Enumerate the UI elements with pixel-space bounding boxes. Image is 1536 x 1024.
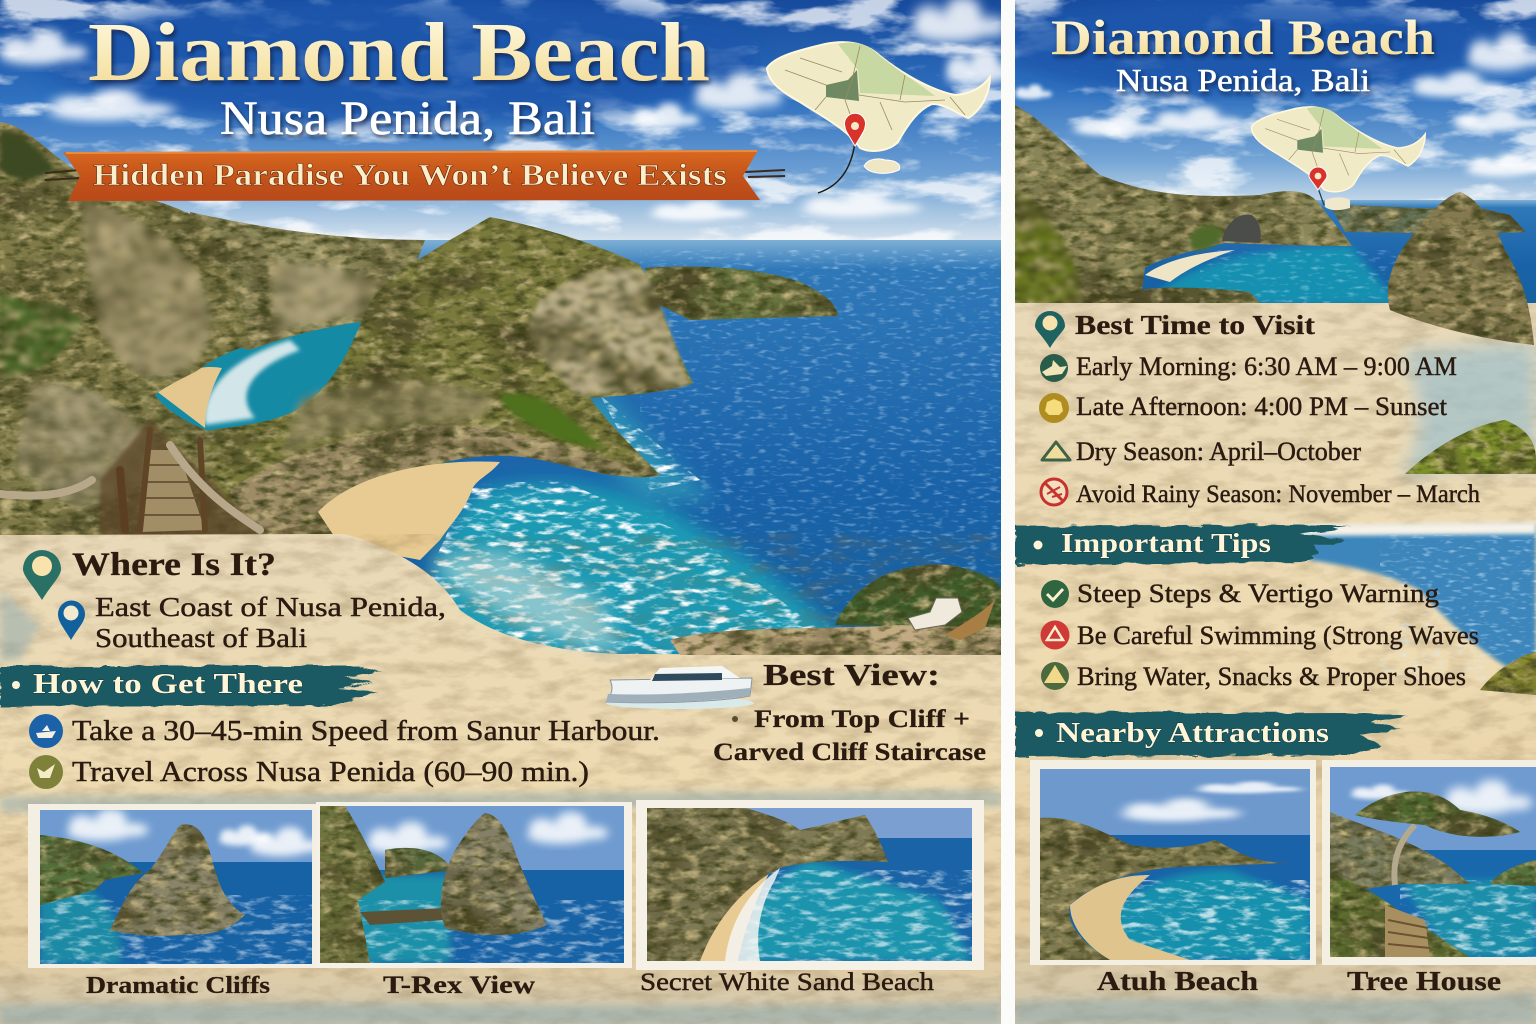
photo: atuh beach: [1030, 760, 1316, 965]
route step: speed boat: Take a 30–45-min Speed from Sanur Harbour.: [72, 716, 660, 747]
where is it: heading: Where Is It?: [72, 547, 276, 583]
right scene: sea stack: [1388, 192, 1534, 345]
photo: t-rex view: [316, 802, 632, 968]
photo: tree house: [1322, 760, 1536, 965]
right scene: sky and clouds: [1000, 0, 1536, 215]
photo captions: Tree House: [1347, 966, 1501, 996]
best time: late afternoon: Late Afternoon: 4:00 PM – Sunset: [1076, 392, 1448, 421]
title: Diamond Beach: [1051, 9, 1435, 65]
bush near dry season row: [1405, 420, 1536, 474]
where is it: location text: [95, 592, 446, 653]
hero scene: left cliffs: [0, 122, 250, 540]
map: Bali with pin: [767, 42, 990, 193]
best time: dry season: Dry Season: April–October: [1076, 437, 1361, 466]
tip: careful swimming: Be Careful Swimming (Strong Waves: [1077, 621, 1479, 650]
photo captions: [86, 969, 935, 999]
route step: travel across island: Travel Across Nusa Penida (60–90 min.): [72, 757, 589, 788]
best view: text: Carved Cliff Staircase: [713, 739, 986, 766]
map: Bali with pin: [1251, 107, 1425, 210]
photo captions: Secret White Sand Beach: [640, 969, 935, 996]
best time: heading: Best Time to Visit: [1075, 310, 1315, 340]
heading strip: nearby attractions: [1015, 712, 1408, 757]
hero scene: rope railing and stairs: [0, 420, 265, 540]
tip: steep steps: Steep Steps & Vertigo Warning: [1077, 579, 1439, 608]
hero scene: back cliffs: [190, 212, 425, 350]
best time: pin icon: [1035, 311, 1065, 348]
right scene: distant headland: [1330, 205, 1526, 234]
icon: speed boat: [606, 666, 754, 709]
right sea behind tips: [1300, 522, 1536, 680]
hero scene: T-Rex headland: [209, 217, 693, 545]
panel: left poster: [0, 0, 1001, 1024]
tip: bring water: Bring Water, Snacks & Proper Shoes: [1077, 662, 1466, 691]
bush near tips: [1480, 652, 1536, 695]
hero scene: front beach: [318, 461, 500, 560]
right scene: ocean: [1015, 200, 1536, 310]
photo: dramatic cliffs: [28, 804, 324, 968]
heading strip: important tips: Important Tips: [1061, 528, 1271, 558]
orange ribbon banner: Hidden Paradise You Won’t Believe Exists: [93, 157, 727, 192]
where is it: pin icon: [23, 550, 61, 600]
photo captions: T-Rex View: [383, 972, 535, 999]
best time: avoid rainy season: Avoid Rainy Season: November – March: [1076, 481, 1480, 508]
heading strip: how to get there: How to Get There: [33, 669, 303, 700]
hero scene: distant headland: [645, 267, 838, 320]
right scene: left cliffs and arch: [1015, 105, 1352, 303]
subtitle: Nusa Penida, Bali: [1116, 62, 1370, 98]
best view: text: From Top Cliff +: [754, 706, 970, 733]
orange ribbon banner: [45, 150, 785, 201]
where is it: location text: East Coast of Nusa Penida,: [95, 592, 446, 622]
best time: early morning: Early Morning: 6:30 AM – 9:00 AM: [1076, 352, 1457, 381]
parchment information panel: [1015, 303, 1536, 1024]
panel: right poster: [1015, 0, 1536, 1024]
best view: heading: Best View:: [763, 657, 940, 692]
photo captions: Atuh Beach: [1097, 966, 1258, 996]
hero scene: left bay: [150, 312, 375, 440]
parchment information panel: [0, 534, 1001, 1024]
title: Diamond Beach: [88, 6, 710, 99]
heading strip: how to get there: [0, 666, 381, 707]
where is it: location text: Southeast of Bali: [95, 623, 307, 653]
photo captions: [1097, 966, 1501, 996]
where is it: blue pin icon: [58, 600, 85, 640]
hero scene: ocean: [0, 240, 1001, 660]
photo: secret white sand beach: [636, 800, 984, 970]
heading strip: nearby attractions: Nearby Attractions: [1056, 718, 1329, 749]
heading strip: important tips: [1015, 525, 1352, 565]
rocky ledge with bush and car: [670, 564, 1001, 655]
subtitle: Nusa Penida, Bali: [220, 92, 595, 145]
hero scene: sky and clouds: [0, 0, 1019, 245]
best view: text: [713, 706, 986, 766]
photo captions: Dramatic Cliffs: [86, 973, 270, 999]
